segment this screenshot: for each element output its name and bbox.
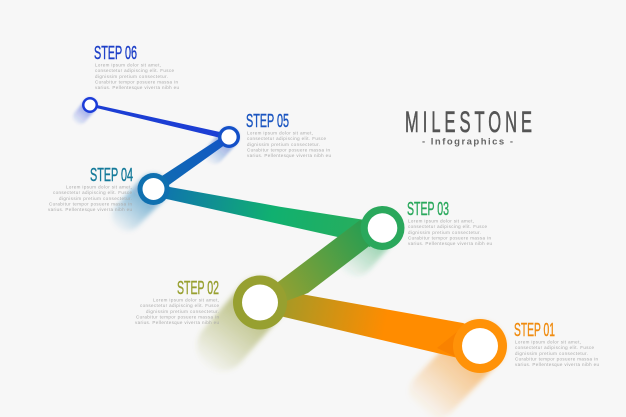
step 05 text: STEP 05 [246, 111, 289, 131]
node: step 4 [138, 173, 170, 205]
step 06 text: STEP 06 [94, 43, 137, 63]
step 03 text: STEP 03 [407, 199, 449, 219]
step 03 text: Lorem ipsum dolor sit amet, [408, 218, 474, 224]
step 02 text: varius. Pellentesque viverra nibh eu [135, 320, 219, 325]
step 02 text: consectetur adipiscing elit. Fusce [140, 303, 219, 308]
shadows [80, 105, 480, 394]
step 05 text: dignissim pretium consectetur. [247, 142, 320, 147]
timeline bar: step 5 to step 4 [150, 134, 231, 194]
timeline bar: step 6 to step 5 [90, 104, 229, 140]
node: step 5 [218, 126, 240, 148]
step 03 text: Curabitur tempor posuere massa in [408, 236, 491, 240]
node: step 1 [453, 319, 507, 373]
step 05 text: consectetur adipiscing elit. Fusce [247, 136, 326, 141]
node: step 6 [82, 97, 98, 113]
step 03 text: varius. Pellentesque viverra nibh eu [408, 241, 492, 246]
node: step 3 [360, 206, 404, 250]
step 04 text: Curabitur tempor posuere massa in [49, 202, 132, 206]
step 04 text: Lorem ipsum dolor sit amet, [66, 184, 132, 190]
title: - Infographics - [422, 136, 513, 148]
step 01 text: Curabitur tempor posuere massa in [515, 356, 598, 362]
step 01 text: varius. Pellentesque viverra nibh eu [515, 362, 599, 367]
step 03 text [407, 199, 492, 246]
step 03 text: dignissim pretium consectetur. [408, 230, 481, 235]
step 04 text: varius. Pellentesque viverra nibh eu [48, 207, 132, 212]
step 06 text: consectetur adipiscing elit. Fusce [95, 68, 174, 73]
step 04 text: STEP 04 [90, 165, 133, 185]
step 05 text: varius. Pellentesque viverra nibh eu [247, 153, 331, 158]
timeline bar: step 3 to step 2 [262, 220, 382, 310]
step 06 text [94, 43, 179, 90]
step 06 text: Lorem ipsum dolor sit amet, [95, 62, 161, 68]
node: step 2 [233, 276, 287, 330]
step 01 text: Lorem ipsum dolor sit amet, [515, 340, 581, 344]
timeline bar: step 4 to step 3 [153, 184, 382, 247]
step 01 text: dignissim pretium consectetur. [515, 351, 588, 356]
timeline bar: step 2 to step 1 [262, 287, 480, 363]
step 06 text: Curabitur tempor posuere massa in [95, 80, 178, 84]
step 01 text [514, 320, 599, 367]
step 02 text [135, 278, 219, 325]
step 02 text: Curabitur tempor posuere massa in [136, 314, 219, 320]
step 05 text: Lorem ipsum dolor sit amet, [247, 130, 313, 136]
title: MILESTONE [405, 106, 532, 139]
step 01 text: STEP 01 [514, 320, 555, 340]
step 04 text [48, 165, 133, 212]
step 06 text: varius. Pellentesque viverra nibh eu [95, 85, 179, 90]
step 04 text: consectetur adipiscing elit. Fusce [53, 190, 132, 195]
step 04 text: dignissim pretium consectetur. [59, 196, 132, 201]
bar shade near step 1 [437, 331, 458, 358]
step 01 text: consectetur adipiscing elit. Fusce [515, 345, 594, 350]
step 05 text [246, 111, 331, 158]
step 06 text: dignissim pretium consectetur. [95, 74, 168, 79]
step 03 text: consectetur adipiscing elit. Fusce [408, 224, 487, 229]
step 05 text: Curabitur tempor posuere massa in [247, 148, 330, 152]
step 02 text: STEP 02 [177, 278, 219, 298]
step 02 text: dignissim pretium consectetur. [146, 309, 219, 314]
step 02 text: Lorem ipsum dolor sit amet, [153, 298, 219, 302]
